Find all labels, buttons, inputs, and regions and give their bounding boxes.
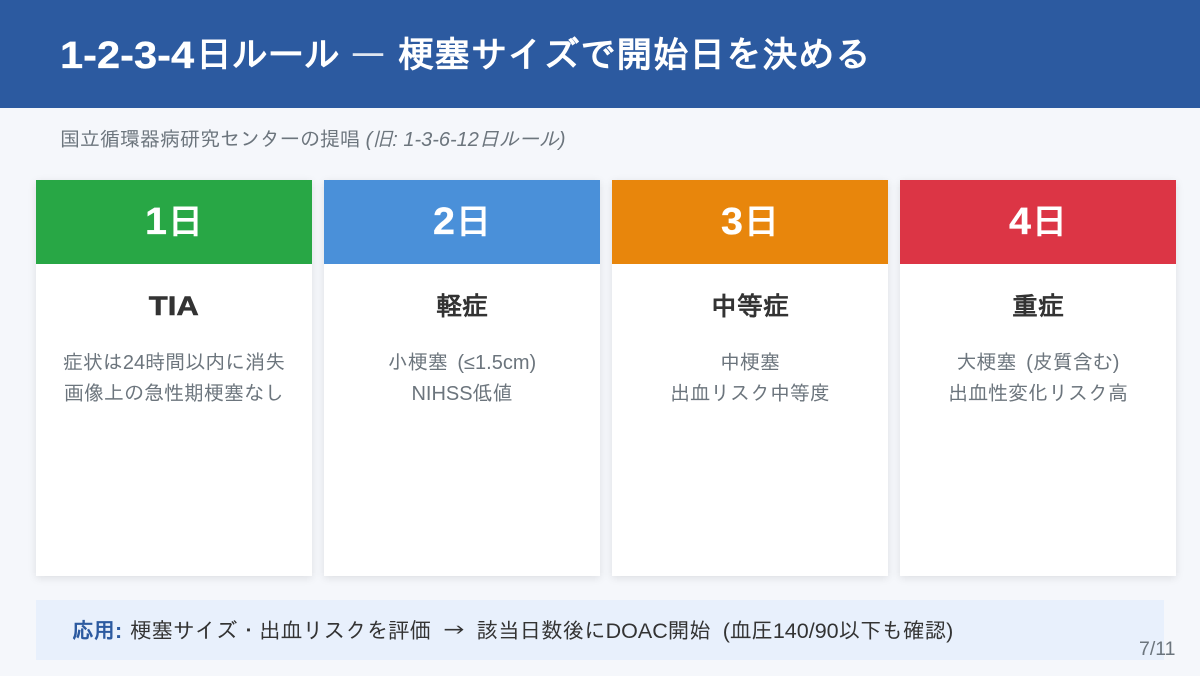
day badge: 1日: 日 [168, 201, 204, 242]
day badge: 3日: 日 [744, 201, 780, 242]
day badge: 1日 [36, 180, 312, 264]
subtitle: 国立循環器病研究センターの提唱 (旧: 1-3-6-12日ルール) [60, 128, 566, 150]
panel: 3 days moderate [612, 180, 888, 576]
description: mild: 小梗塞 (≤1.5cm) [388, 352, 536, 374]
page number: 7/11 [1139, 638, 1176, 660]
day badge: 2日: 日 [456, 201, 492, 242]
day badge: 2日: 2 [432, 201, 454, 243]
description: moderate: 中梗塞 [720, 352, 780, 374]
day badge: 4日 [900, 180, 1176, 264]
day badge: 3日 [612, 180, 888, 264]
application callout [36, 600, 1164, 660]
description: TIA [63, 352, 285, 405]
description: mild: NIHSS低値 [411, 383, 513, 405]
description: severe [948, 352, 1128, 405]
heading: 重症: 重症 [1012, 291, 1064, 321]
description: moderate: 出血リスク中等度 [670, 383, 830, 405]
day badge: 1日: 1 [144, 201, 166, 243]
description: TIA: 画像上の急性期梗塞なし [64, 383, 284, 405]
day badge: 4日: 日 [1032, 201, 1068, 242]
description: TIA: 症状は24時間以内に消失 [63, 352, 285, 374]
title: 1-2-3-4 [60, 35, 194, 77]
heading: TIA: TIA [149, 291, 199, 321]
day badge: 3日: 3 [720, 201, 742, 243]
day badge: 4日: 4 [1008, 201, 1030, 243]
description: moderate [670, 352, 830, 405]
panel: 2 days mild [324, 180, 600, 576]
panel: 1 day TIA [36, 180, 312, 576]
title: 日ルール — 梗塞サイズで開始日を決める [196, 34, 871, 75]
heading: 軽症: 軽症 [436, 291, 488, 321]
header band [0, 0, 1200, 108]
application callout: 応用: 梗塞サイズ・出血リスクを評価 → 該当日数後にDOAC開始 (血圧140/90以下も確認) [72, 619, 953, 643]
description: mild [388, 352, 536, 405]
description: severe: 出血性変化リスク高 [948, 383, 1128, 405]
description: severe: 大梗塞 (皮質含む) [957, 352, 1119, 374]
panel: 4 days severe [900, 180, 1176, 576]
heading: 中等症: 中等症 [711, 291, 789, 321]
day badge: 2日 [324, 180, 600, 264]
